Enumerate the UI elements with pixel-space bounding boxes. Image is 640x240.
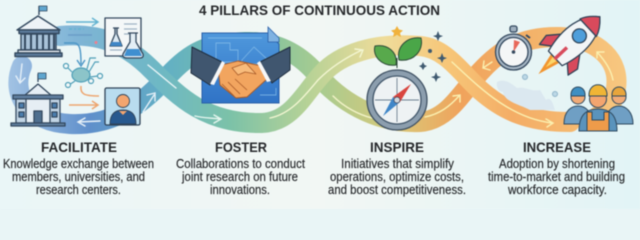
icon: network node <box>64 58 102 88</box>
title: 4 PILLARS OF CONTINUOUS ACTION <box>199 3 440 18</box>
icon: orange arrows <box>69 86 99 109</box>
icon: sprout leaves <box>374 38 422 68</box>
column: facilitate text: Knowledge exchange between <box>3 157 154 171</box>
icon: workers <box>564 85 633 131</box>
icon: university building top <box>15 6 62 56</box>
icon: compass <box>367 70 427 130</box>
column: facilitate text: FACILITATE <box>41 139 117 155</box>
column: foster text: FOSTER <box>215 139 267 155</box>
icon: stopwatch <box>496 26 532 70</box>
panel: foster icons <box>191 27 290 103</box>
column: inspire text: INSPIRE <box>370 139 424 155</box>
icon: lab document and flasks <box>105 18 143 58</box>
panel: facilitate icons <box>11 6 143 126</box>
icon: smoke cloud <box>497 81 555 110</box>
column: facilitate text <box>3 139 154 197</box>
column: inspire text: operations, optimize costs, <box>330 170 464 184</box>
icon: sparkles <box>419 31 447 82</box>
column: inspire text: Initiatives that simplify <box>341 157 455 171</box>
icon: handshake <box>191 47 290 98</box>
column: increase text: workforce capacity. <box>507 183 607 197</box>
column: increase text <box>488 139 625 197</box>
icon: small bubbles <box>522 74 558 96</box>
column: increase text: INCREASE <box>523 139 591 155</box>
icon: blueprint <box>202 27 279 103</box>
ribbon: continuous infinity wave <box>18 35 617 124</box>
ribbon arrows <box>16 49 613 127</box>
icon: data arrows top <box>64 18 98 66</box>
icon: rocket <box>523 0 616 91</box>
column: foster text: joint research on future <box>181 170 298 184</box>
column: facilitate text: members, universities, and <box>12 170 145 184</box>
icon: university building bottom <box>11 73 65 126</box>
column: foster text <box>176 139 305 197</box>
column: foster text: Collaborations to conduct <box>176 157 305 171</box>
column: increase text: Adoption by shortening <box>499 157 615 171</box>
icon: person card <box>105 88 140 125</box>
column: facilitate text: research centers. <box>36 183 121 197</box>
panel: inspire icons <box>367 26 447 130</box>
column: inspire text: and boost competitiveness. <box>328 183 466 197</box>
column: inspire text <box>328 139 466 197</box>
icon: star <box>391 26 403 37</box>
column: foster text: innovations. <box>210 183 270 197</box>
panel: increase icons <box>496 0 633 131</box>
column: increase text: time-to-market and building <box>488 170 625 184</box>
